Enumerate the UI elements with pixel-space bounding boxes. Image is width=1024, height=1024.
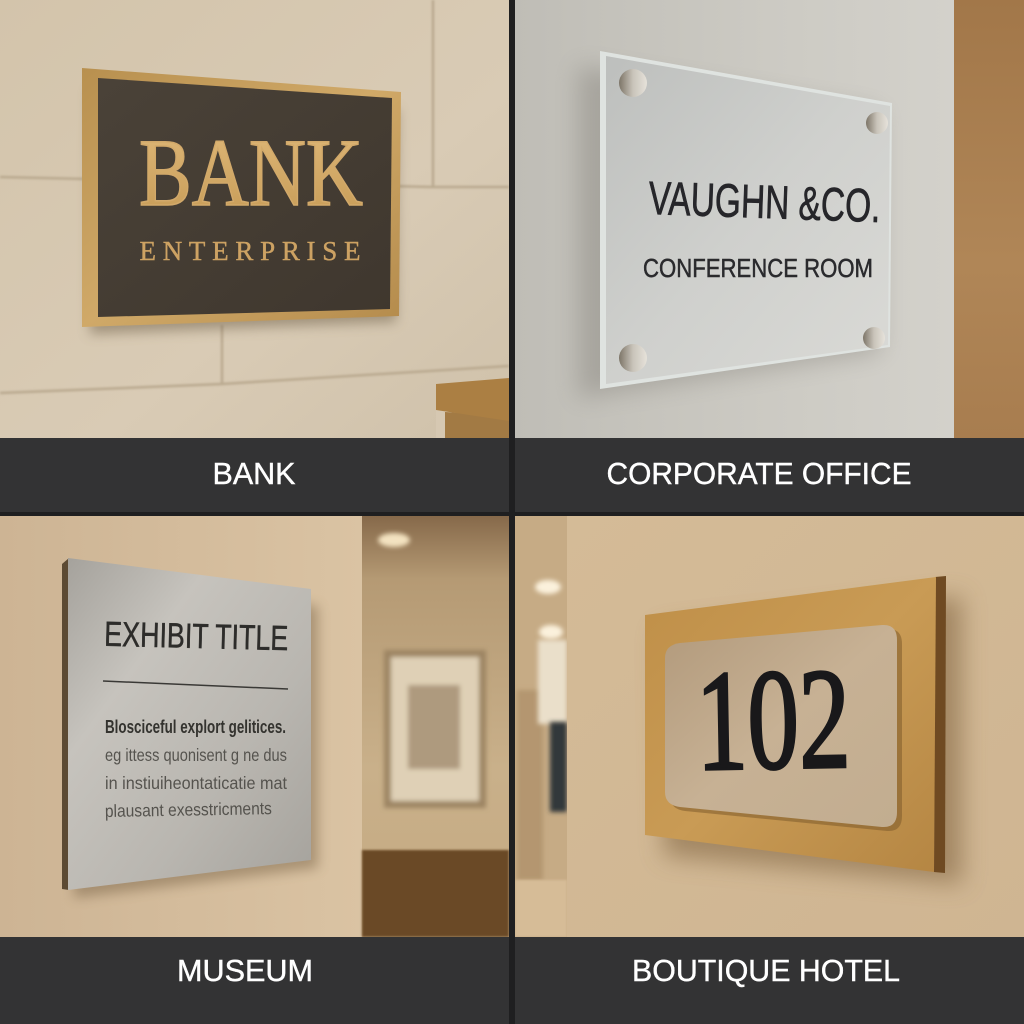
caption: BANK [0,438,509,512]
caption: BOUTIQUE HOTEL: BOUTIQUE HOTEL [632,953,900,988]
caption: MUSEUM: MUSEUM [177,953,313,988]
sign: bank plaque [82,68,401,334]
blurred framed picture [384,650,486,808]
panel: boutique hotel [515,516,1024,937]
sign text: EXHIBIT TITLE: EXHIBIT TITLE [104,615,289,658]
caption: CORPORATE OFFICE [515,438,1024,512]
caption: MUSEUM [0,937,509,1024]
furniture [436,378,509,438]
sign body text: eg ittess quonisent g ne dus [105,745,287,765]
sign text: CONFERENCE ROOM: CONFERENCE ROOM [643,253,873,283]
sign: brushed steel plaque [62,558,318,898]
panel: museum [0,516,509,937]
sign body text: Blosciceful explort gelitices. [105,716,286,737]
panel: bank [0,0,509,438]
sign body text: in instiuiheontaticatie mat [105,773,287,793]
caption: BOUTIQUE HOTEL [515,937,1024,1024]
panel: corporate office [515,0,1024,438]
caption: CORPORATE OFFICE: CORPORATE OFFICE [606,456,912,491]
standoff pins [619,69,888,372]
sign text: BANK: BANK [139,119,363,226]
caption: BANK: BANK [212,456,296,491]
sign: wood and plate [645,576,962,884]
sign text: VAUGHN & CO.: VAUGHN &CO. [648,171,881,232]
sign text: 102: 102 [695,640,852,801]
sign body text [105,716,287,821]
sign body text: plausant exesstricments [105,798,272,821]
sign: frosted acrylic [578,51,892,398]
sign text: ENTERPRISE: ENTERPRISE [140,236,362,266]
